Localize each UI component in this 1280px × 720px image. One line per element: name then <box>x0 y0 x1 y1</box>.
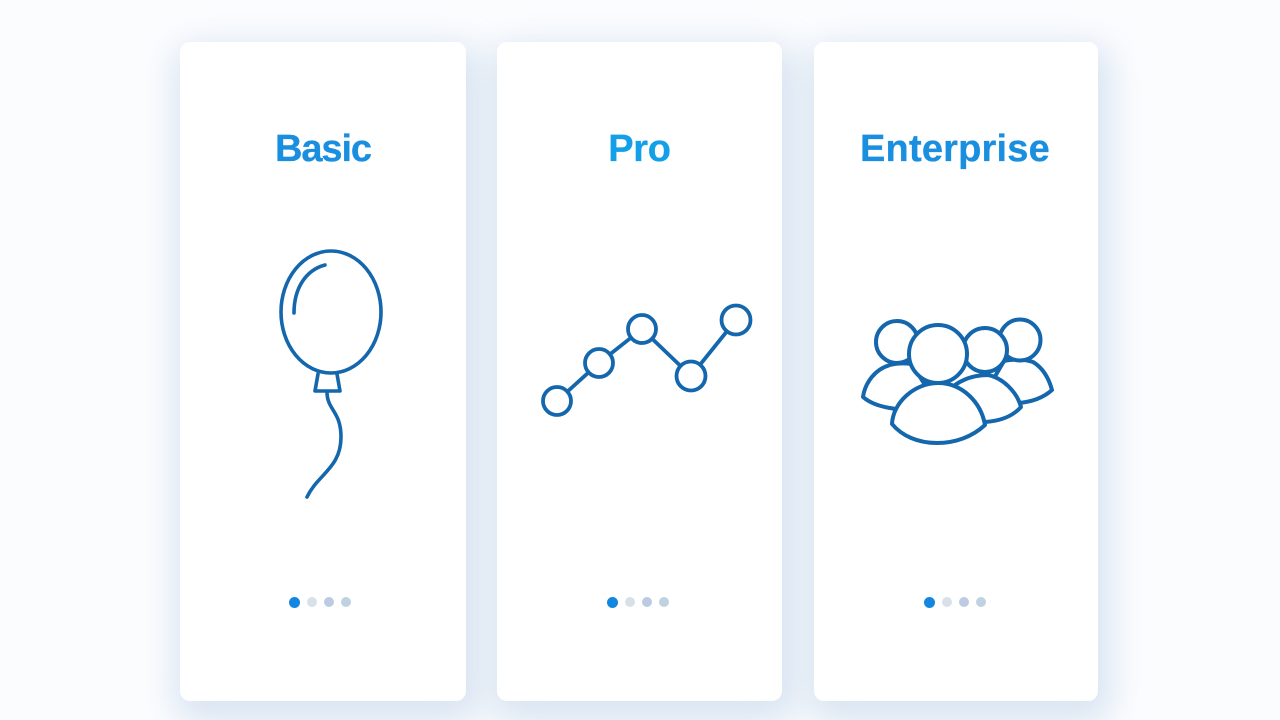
pagination dots <box>924 597 986 608</box>
pagination dots <box>607 597 669 608</box>
heading: Enterprise: Enterprise <box>860 128 1050 170</box>
panel: Pro plan <box>497 42 782 701</box>
panel: Basic plan <box>180 42 466 701</box>
icon: balloon <box>279 249 383 499</box>
icon: group of people <box>861 318 1054 445</box>
heading: Basic: Basic <box>275 128 371 170</box>
panel: Enterprise plan <box>814 42 1098 701</box>
pagination dots <box>289 597 351 608</box>
heading: Pro: Pro <box>608 128 671 170</box>
icon: line chart with nodes <box>541 304 752 417</box>
